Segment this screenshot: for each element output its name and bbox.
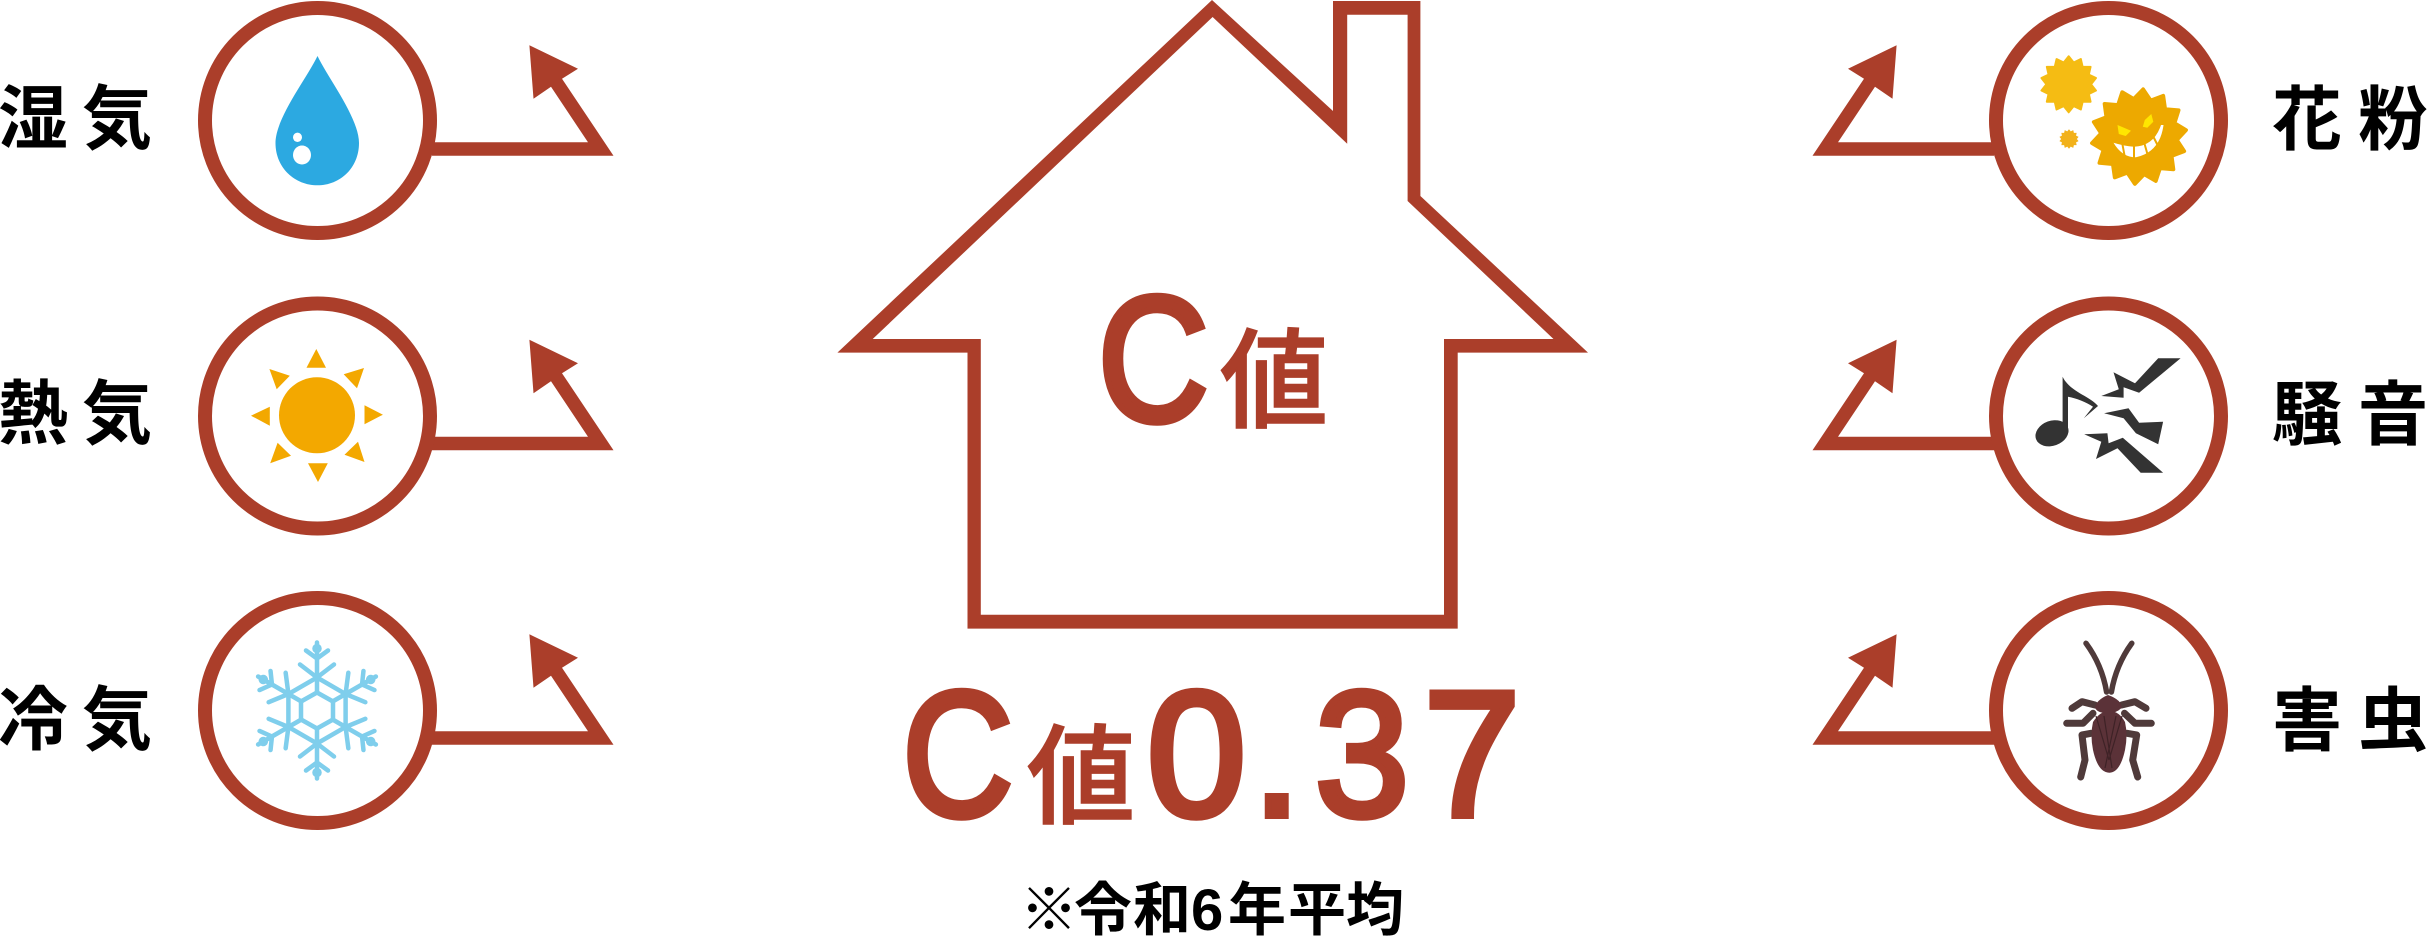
headline value: C値0.37: .	[1252, 654, 1301, 854]
arrow: noise	[1812, 340, 1994, 450]
icon: pollen particles	[2041, 56, 2189, 188]
headline value: C値0.37: 値	[1027, 717, 1135, 838]
ring: humidity	[205, 8, 430, 233]
headline value: C値0.37	[902, 654, 1520, 854]
item: heat	[0, 304, 614, 528]
item: pollen	[1812, 8, 2428, 233]
headline value: C値0.37: C	[902, 656, 1013, 854]
item: humidity	[0, 8, 614, 233]
house label: C値: C	[1098, 261, 1209, 459]
label: humidity: 湿気	[0, 80, 152, 158]
label: heat: 熱気	[0, 375, 152, 453]
label: pollen: 花粉	[2272, 81, 2428, 159]
icon: broken note	[2032, 358, 2181, 473]
item: noise	[1812, 304, 2428, 528]
icon: snowflake	[250, 642, 384, 778]
headline value: C値0.37: 3	[1315, 655, 1409, 853]
ring: pests	[1996, 598, 2221, 823]
ring: noise	[1996, 304, 2221, 528]
arrow: cold air	[432, 634, 614, 745]
label: pests: 害虫	[2272, 682, 2428, 760]
house label: C値: 値	[1220, 321, 1328, 442]
item: pests	[1812, 598, 2428, 823]
arrow: pollen	[1812, 45, 1994, 156]
headline value: C値0.37: 0	[1147, 654, 1246, 854]
arrow: heat	[432, 340, 614, 450]
ring: cold air	[205, 598, 430, 823]
label: cold air: 冷気	[0, 681, 152, 759]
item: cold air	[0, 598, 614, 823]
label: noise: 騒音	[2272, 376, 2428, 454]
arrow: humidity	[432, 45, 614, 156]
icon: cockroach	[2067, 643, 2151, 777]
house label: C値	[1098, 261, 1328, 459]
arrow: pests	[1812, 634, 1994, 745]
ring: heat	[205, 304, 430, 528]
headline value: C値0.37: 7	[1424, 655, 1520, 854]
ring: pollen	[1996, 8, 2221, 233]
icon: water drop	[276, 56, 359, 185]
icon: sun	[251, 349, 383, 482]
house outline	[837, 0, 1588, 629]
